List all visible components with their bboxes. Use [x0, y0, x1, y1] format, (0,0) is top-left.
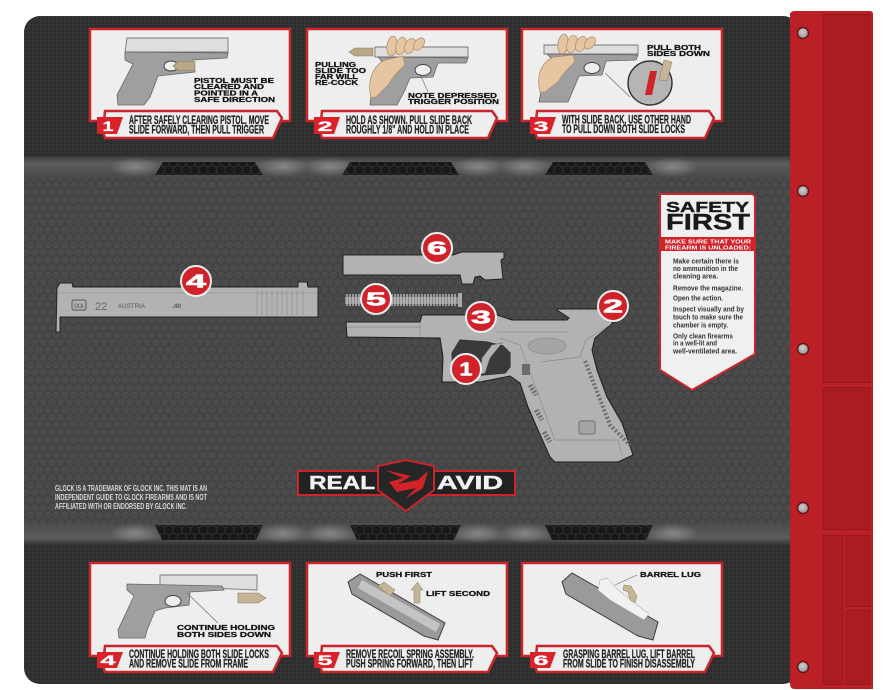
annotation: continue holding: [177, 623, 275, 639]
safety checklist: touch to make sure the: [673, 314, 743, 322]
annotation: pull both sides: [647, 43, 710, 58]
annotation: barrel lug: BARREL LUG: [640, 570, 701, 579]
tray compartment: lower right: [846, 610, 870, 684]
center hex panel: [24, 177, 799, 524]
caption: step 5: [314, 646, 497, 672]
tray compartment: narrow left: [823, 536, 843, 684]
heading: safety first: FIRST: [666, 210, 751, 234]
caption: step 1: AFTER SAFELY CLEARING PISTOL, MOVE: [129, 115, 269, 127]
caption: step 1: 1: [102, 118, 114, 134]
badge: callout 3: [466, 302, 496, 332]
tray compartment: middle: [823, 388, 870, 530]
safety checklist: Only clean firearms: [673, 334, 733, 340]
warning band: FIREARM IS UNLOADED:: [665, 246, 751, 252]
disclaimer text: AFFILIATED WITH OR ENDORSED BY GLOCK INC.: [55, 502, 187, 511]
caption: step 6: FROM SLIDE TO FINISH DISASSEMBLY: [563, 658, 695, 670]
annotation: re-cock warning: RE-COCK: [315, 78, 359, 87]
safety checklist: [672, 258, 744, 356]
caption: step 1: [97, 111, 282, 138]
annotation: push first: PUSH FIRST: [376, 570, 433, 579]
caption: step 3: 3: [534, 118, 549, 134]
annotation: safe direction: [194, 76, 275, 104]
badge: callout 2: [598, 291, 628, 321]
warning band: [661, 237, 754, 252]
icon: pistol with trigger arrow: [117, 38, 228, 105]
caption: step 3: WITH SLIDE BACK, USE OTHER HAND: [562, 114, 691, 126]
part: slide (4): .40: [172, 303, 181, 310]
badge: callout 6: [422, 233, 452, 263]
annotation: pull both sides: SIDES DOWN: [647, 49, 710, 58]
warning band: MAKE SURE THAT YOUR: [665, 240, 751, 246]
annotation: safe direction: PISTOL MUST BE: [194, 76, 274, 85]
annotation: pull both sides: PULL BOTH: [647, 43, 701, 52]
badge: callout 1: 1: [460, 360, 472, 380]
badge: callout 4: 4: [186, 272, 206, 292]
caption: step 3: [530, 111, 714, 138]
disclaimer text: [55, 484, 207, 511]
panel: step 3: [522, 29, 722, 138]
badge: callout 2: 2: [603, 296, 623, 316]
panel: step 2: [307, 29, 507, 138]
annotation: safe direction: CLEARED AND: [194, 82, 265, 91]
badge: callout 5: [361, 284, 391, 314]
caption: step 2: ROUGHLY 1/8" AND HOLD IN PLACE: [346, 124, 469, 136]
annotation: re-cock warning: FAR WILL: [315, 72, 358, 81]
bottom groove band: [24, 523, 799, 545]
heading: safety first: SAFETY: [666, 199, 749, 216]
caption: step 2: 2: [318, 118, 333, 134]
disclaimer text: INDEPENDENT GUIDE TO GLOCK FIREARMS AND IS NOT: [55, 493, 207, 502]
part: pistol frame: [346, 309, 633, 462]
top groove band: [24, 156, 799, 177]
badge: callout 6: 6: [427, 238, 447, 258]
caption: step 4: CONTINUE HOLDING BOTH SLIDE LOCKS: [129, 649, 269, 661]
part: barrel (6): [343, 252, 504, 284]
part: recoil spring (5): [345, 293, 462, 307]
logo: Real Avid: REAL: [309, 473, 375, 493]
icon: hand pulling pistol slide: [349, 35, 468, 105]
safety checklist: cleaning area.: [673, 274, 718, 280]
panel: step 4: [90, 563, 290, 672]
badge: callout 4: [181, 266, 211, 296]
annotation: re-cock warning: PULLING: [315, 60, 356, 69]
part: slide (4): 22: [95, 301, 107, 313]
tray compartment: upper right: [846, 536, 870, 606]
annotation: safe direction: POINTED IN A: [194, 88, 259, 98]
annotation: continue holding: CONTINUE HOLDING: [177, 623, 275, 632]
caption: step 6: [530, 646, 714, 672]
caption: step 4: AND REMOVE SLIDE FROM FRAME: [129, 658, 248, 670]
part: slide (4): AUSTRIA: [118, 304, 145, 310]
disclaimer text: GLOCK IS A TRADEMARK OF GLOCK INC. THIS MAT IS AN: [55, 484, 207, 493]
icon: slide with barrel: [562, 573, 658, 640]
part: slide (4): IXX: [74, 304, 84, 310]
safety checklist: Inspect visually and by: [673, 306, 744, 314]
safety checklist: chamber is empty.: [673, 322, 728, 330]
annotation: safe direction: SAFE DIRECTION: [194, 95, 275, 104]
annotation: re-cock warning: [315, 60, 366, 87]
icon: slide lock detail: [605, 60, 672, 105]
part: slide (4): [56, 282, 318, 332]
badge: callout 3: 3: [471, 308, 491, 328]
panel: step 6: [522, 563, 722, 672]
caption: step 5: PUSH SPRING FORWARD, THEN LIFT: [346, 658, 473, 670]
panel: step 1: [90, 29, 290, 138]
logo shield: [378, 460, 434, 511]
annotation: trigger position: [408, 74, 499, 106]
heading: safety first: [666, 199, 751, 234]
icon: hand holding pistol: [539, 33, 638, 102]
tray compartment: long: [823, 14, 870, 382]
caption: step 2: [314, 111, 497, 138]
logo: Real Avid: [298, 460, 515, 511]
icon: slide with recoil spring: [348, 574, 445, 640]
caption: step 2: HOLD AS SHOWN. PULL SLIDE BACK: [346, 115, 472, 127]
panel: step 5: [307, 563, 507, 672]
caption: step 3: TO PULL DOWN BOTH SLIDE LOCKS: [562, 124, 685, 136]
safety checklist: Remove the magazine.: [673, 286, 743, 292]
icon: pistol with slide moving forward: [118, 575, 266, 638]
safety checklist: no ammunition in the: [673, 266, 738, 273]
annotation: trigger position: TRIGGER POSITION: [408, 97, 499, 106]
caption: step 5: REMOVE RECOIL SPRING ASSEMBLY.: [346, 649, 474, 661]
caption: step 4: [97, 646, 282, 672]
safety checklist: well-ventilated area.: [672, 348, 737, 356]
tray screws: [798, 28, 808, 672]
safety checklist: Open the action.: [673, 296, 723, 302]
annotation: continue holding: BOTH SIDES DOWN: [177, 630, 271, 639]
caption: step 4: 4: [100, 652, 116, 668]
caption: step 6: 6: [534, 652, 549, 668]
annotation: re-cock warning: SLIDE TOO: [315, 66, 366, 75]
caption: step 6: GRASPING BARREL LUG, LIFT BARREL: [563, 649, 695, 661]
tray: red parts tray: [790, 11, 873, 689]
annotation: lift second: LIFT SECOND: [426, 589, 491, 598]
caption: step 5: 5: [318, 652, 333, 668]
badge: callout 5: 5: [366, 290, 386, 310]
annotation: trigger position: NOTE DEPRESSED: [408, 91, 498, 100]
safety checklist: Make certain there is: [673, 258, 739, 266]
safety checklist: in a well-lit and: [673, 340, 717, 348]
caption: step 1: SLIDE FORWARD, THEN PULL TRIGGER: [129, 124, 264, 136]
logo: Real Avid: AVID: [437, 473, 503, 493]
panel: safety first: [660, 194, 755, 390]
badge: callout 1: [451, 354, 481, 384]
